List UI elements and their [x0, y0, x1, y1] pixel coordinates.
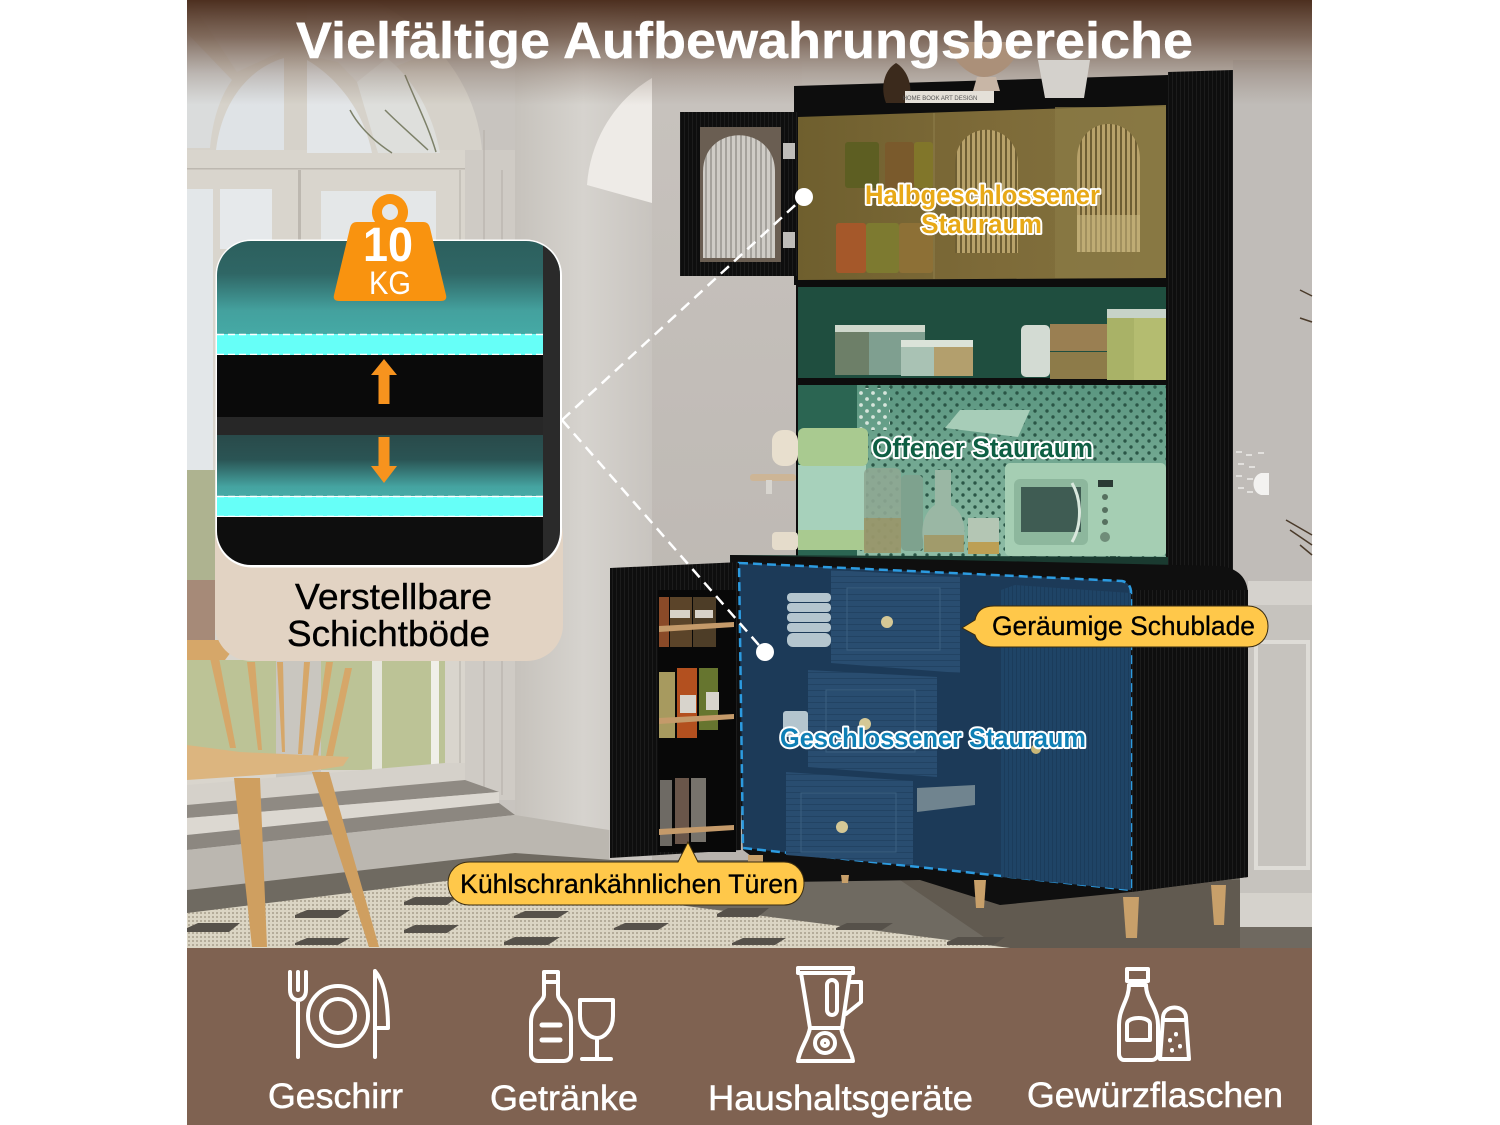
drawer 2	[808, 670, 937, 777]
right door	[1001, 585, 1131, 890]
window	[187, 0, 515, 850]
side post	[1168, 70, 1233, 570]
label: closed storage: Geschlossener Stauraum	[780, 723, 1086, 753]
arrow up	[371, 359, 397, 404]
label: semi-closed storage: Stauraum	[921, 209, 1042, 239]
arches	[955, 130, 1018, 253]
label: semi-closed storage	[865, 180, 1100, 239]
panel: open storage	[798, 385, 1166, 557]
callout: fridge-like doors: Kühlschrankähnlichen Türen	[460, 869, 798, 899]
icon: plate and cutlery	[290, 971, 388, 1057]
wooden chair	[187, 640, 379, 947]
caption: appliances: Haushaltsgeräte	[708, 1079, 973, 1118]
bowls	[783, 593, 831, 737]
glassware	[864, 468, 999, 554]
panel: closed storage	[739, 563, 1131, 890]
panel: semi-closed storage	[798, 105, 1166, 280]
weight badge: KG	[369, 265, 411, 301]
callout: spacious drawer	[962, 606, 1268, 647]
leader dot: lower	[756, 643, 774, 661]
weight badge	[334, 194, 446, 301]
icon: bottle and glass	[531, 972, 613, 1061]
callout: fridge-like doors	[448, 842, 804, 905]
caption: spice bottles: Gewürzflaschen	[1027, 1076, 1283, 1115]
shelf detail image	[217, 241, 560, 565]
decor on top of cabinet: HOME BOOK ART DESIGN	[903, 96, 977, 102]
casing	[465, 150, 515, 800]
bottom band	[187, 948, 1312, 1125]
cutlery	[917, 785, 975, 812]
card caption	[287, 576, 492, 654]
open lower door and spice rack	[610, 562, 741, 858]
callout: spacious drawer: Geräumige Schublade	[992, 611, 1255, 641]
jars	[836, 142, 933, 273]
arrow down	[371, 437, 397, 483]
counter surface	[730, 555, 1168, 570]
card caption: Schichtböde	[287, 613, 490, 654]
open upper door	[680, 112, 798, 276]
right wall wainscot	[1240, 581, 1312, 948]
upper hutch cabinet	[730, 70, 1233, 570]
decor on top of cabinet	[883, 42, 1090, 103]
panel: adjustable shelves card	[215, 240, 563, 661]
dashed leader lines	[562, 197, 804, 652]
rug tiles	[187, 897, 1005, 945]
sunlight patch	[587, 78, 652, 203]
caption: drinks: Getränke	[490, 1079, 638, 1118]
leader dot: upper	[795, 188, 813, 206]
microwave	[1005, 463, 1166, 568]
label: semi-closed storage: Halbgeschlossener	[865, 180, 1100, 210]
drawer 3	[786, 772, 913, 865]
plant leaves	[1286, 290, 1312, 555]
drawer 1	[831, 570, 960, 673]
top brown shade	[187, 0, 1312, 105]
icon: blender	[798, 968, 861, 1061]
lower cabinet	[730, 555, 1248, 938]
icon: sauce bottle and shaker	[1119, 969, 1189, 1060]
wooden legs	[748, 855, 1226, 938]
room background	[187, 0, 1312, 948]
caption: tableware: Geschirr	[268, 1077, 403, 1116]
wall outlet	[1236, 452, 1269, 495]
panel: upper open shelf	[798, 287, 1166, 380]
coffee machine	[750, 428, 868, 550]
card caption: Verstellbare	[295, 576, 492, 617]
weight badge: 10	[363, 219, 413, 272]
title: Vielfältige Aufbewahrungsbereiche	[296, 12, 1193, 69]
skirting and floor	[187, 815, 1312, 948]
label: open storage: Offener Stauraum	[872, 433, 1093, 463]
